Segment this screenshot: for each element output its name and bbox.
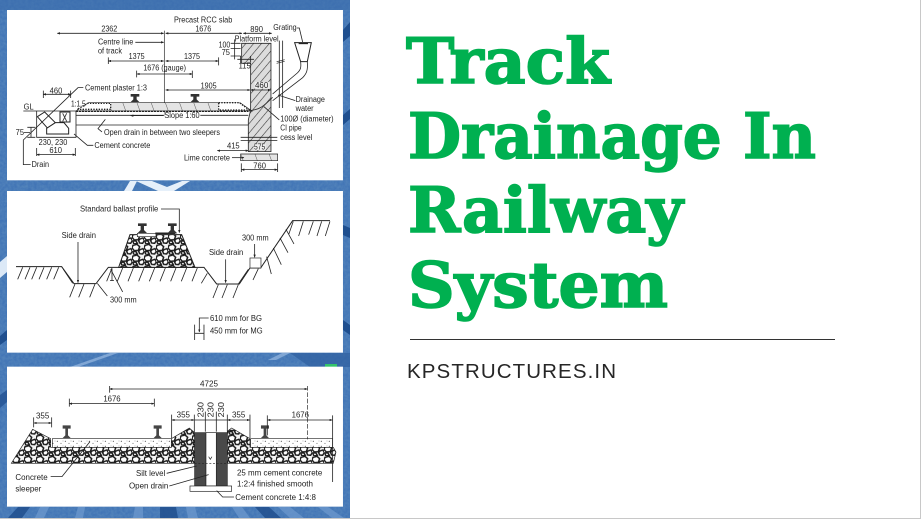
label: track bed with rails	[71, 94, 252, 125]
label: left side drain: GL	[24, 102, 34, 112]
label: concrete sleeper callout: sleeper	[15, 484, 42, 494]
label: platform wall	[219, 39, 271, 152]
label: left callouts: Open drain in between two sleepers	[104, 127, 220, 137]
title	[406, 24, 816, 322]
panel: track with central open drain	[7, 367, 343, 507]
title: Drainage In	[408, 99, 816, 173]
label: silt level and drain callouts	[129, 466, 209, 490]
label: left callouts: Cement concrete	[94, 140, 151, 150]
divider line	[410, 338, 835, 340]
label: centre line of track: 1375	[184, 51, 200, 61]
label: footing	[184, 141, 278, 172]
label: concrete notes	[217, 467, 323, 502]
label: concrete notes: 1:2:4 finished smooth	[237, 479, 313, 489]
label: concrete sleeper callout: Concrete	[15, 472, 48, 482]
label: dimensions: 355	[36, 411, 50, 421]
label: footing: 415	[227, 141, 240, 151]
title: System	[408, 248, 668, 322]
label: width note: 610 mm for BG	[210, 313, 262, 323]
label: platform wall: 100	[219, 39, 231, 49]
label: centre line of track: Centre line	[98, 37, 134, 47]
panel: blue photo backdrop	[0, 0, 350, 518]
label: platform wall: 75	[222, 47, 230, 57]
label: 300 mm catch drain: 300 mm	[242, 232, 269, 242]
label: left side drain: 460	[50, 85, 63, 95]
label: precast slab and top dimensions: 2362	[101, 24, 118, 34]
label: precast slab and top dimensions	[57, 15, 303, 44]
title: Railway	[408, 173, 685, 247]
label: left side drain: 75	[16, 127, 24, 137]
label: width note: 450 mm for MG	[210, 325, 263, 335]
label: silt level and drain callouts: Open drain	[129, 480, 169, 490]
label: 300 mm catch drain	[242, 232, 269, 268]
label: dimensions: 230	[206, 402, 216, 417]
label: centre line of track: of track	[98, 46, 123, 56]
label: dimensions: 1676	[292, 410, 309, 420]
label: precast slab and top dimensions: Precast RCC slab	[174, 15, 233, 25]
label: standard ballast profile: Standard ballast profile	[80, 204, 159, 214]
label: dimensions: 1676	[103, 394, 121, 404]
label: dimensions: 4725	[200, 379, 218, 389]
label: grating and drainage pipe: cess level	[280, 132, 312, 142]
label: precast slab and top dimensions: 1676	[195, 24, 212, 34]
label: left callouts: Drain	[32, 159, 49, 169]
label: rails	[63, 425, 269, 438]
label: grating and drainage pipe	[241, 41, 334, 142]
panel: side elevation with platform wall	[7, 10, 343, 180]
label: right side drain: Side drain	[209, 247, 244, 257]
website label: KPSTRUCTURES.IN	[407, 360, 616, 383]
label: concrete notes: Cement concrete 1:4:8	[235, 492, 316, 502]
label: centre line of track: 1676 (gauge)	[143, 63, 186, 73]
label: precast slab and top dimensions: Platform level	[235, 34, 279, 44]
label: right side drain	[209, 247, 244, 283]
label: concrete sleeper callout	[15, 442, 90, 494]
label: open drain	[190, 433, 232, 491]
label: left callouts: Cement plaster 1:3	[85, 82, 147, 92]
label: centre line of track	[98, 31, 250, 115]
label: 300 mm depth	[110, 269, 137, 305]
label: concrete notes: 25 mm cement concrete	[237, 467, 323, 477]
label: dimensions: 230	[216, 402, 226, 417]
label: ground profile	[16, 221, 330, 284]
label: left side drain: 610	[49, 145, 62, 155]
label: footing: 760	[253, 160, 266, 170]
label: concrete sleepers	[52, 439, 333, 447]
panel: cutting cross-section with side drains	[7, 191, 343, 353]
label: left callouts	[23, 82, 220, 169]
label: track bed with rails: Slope 1:60	[164, 110, 200, 120]
label: 300 mm depth: 300 mm	[110, 295, 137, 305]
label: track bed with rails: 1:1.5	[71, 98, 86, 108]
label: dimensions: 355	[177, 410, 190, 420]
label: dimensions: 230	[195, 402, 205, 417]
label: platform wall: 460	[255, 80, 269, 90]
label: left side drain: Side drain	[62, 230, 96, 240]
label: footing: Lime concrete	[184, 152, 230, 162]
label: grating and drainage pipe: 100Ø (diameter)	[280, 114, 334, 124]
label: dimensions: 355	[232, 410, 246, 420]
label: precast slab and top dimensions: Grating	[273, 22, 297, 32]
label: precast slab and top dimensions: 890	[250, 24, 263, 34]
label: left side drain: 230, 230	[39, 137, 68, 147]
label: grating and drainage pipe: water	[295, 103, 314, 113]
label: platform wall: 115	[239, 61, 251, 71]
label: silt level and drain callouts: Silt level	[136, 468, 165, 478]
label: ballast bed	[11, 428, 336, 463]
label: grating and drainage pipe: Drainage	[296, 94, 325, 104]
label: ballast and rails	[119, 223, 195, 267]
label: dimensions	[34, 379, 333, 482]
label: footing: 575	[254, 141, 266, 151]
label: ground hatching	[18, 221, 330, 298]
label: centre line of track: 1905	[201, 81, 217, 91]
label: centre line of track: 1375	[129, 51, 145, 61]
label: left side drain	[16, 85, 76, 156]
label: width note	[195, 313, 263, 340]
label: standard ballast profile	[80, 204, 179, 233]
title: Track	[406, 24, 611, 98]
label: left side drain	[62, 230, 96, 283]
label: grating and drainage pipe: CI pipe	[280, 123, 302, 133]
